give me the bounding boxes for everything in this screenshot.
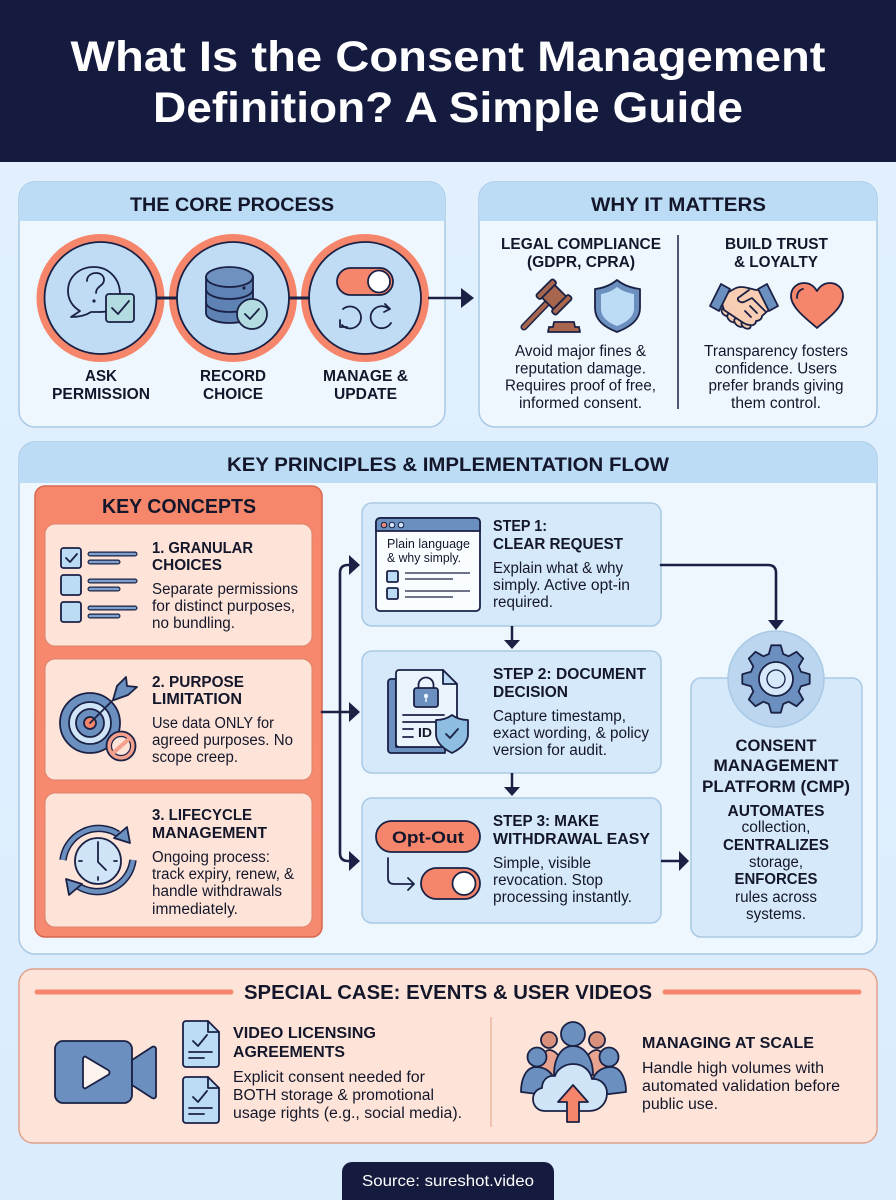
subheading: legal compliance: LEGAL COMPLIANCE — [501, 236, 661, 253]
connector bars between steps — [157, 296, 310, 300]
text: purpose limitation: Use data ONLY for — [152, 715, 274, 732]
text: legal compliance: informed consent. — [519, 395, 642, 412]
arrow: step 3 to platform — [661, 851, 689, 871]
text: step 1: STEP 1: — [493, 518, 547, 535]
text: platform functions — [723, 803, 829, 923]
text: purpose limitation: scope creep. — [152, 749, 238, 766]
icon: video camera — [55, 1041, 156, 1103]
text: step 3: revocation. Stop — [493, 872, 603, 889]
text: platform name — [702, 736, 850, 796]
text: lifecycle management: immediately. — [152, 901, 238, 918]
text: lifecycle management: MANAGEMENT — [152, 825, 267, 842]
label: ask permission: ASK — [85, 368, 117, 385]
label: ask permission: PERMISSION — [52, 386, 150, 403]
heading: key concepts: KEY CONCEPTS — [102, 496, 256, 518]
icon: clock with cycle arrows — [63, 827, 133, 895]
panel: consent management platform — [691, 631, 862, 937]
step: record choice — [173, 238, 293, 403]
text: managing at scale: public use. — [642, 1096, 718, 1113]
heading: the core process: THE CORE PROCESS — [130, 195, 334, 216]
text: granular choices: CHOICES — [152, 557, 222, 574]
text: step 2: exact wording, & policy — [493, 725, 649, 742]
subheading: build trust: & LOYALTY — [734, 254, 818, 271]
icon: document with lock, id and shield: ID — [418, 726, 432, 740]
text: step 1: CLEAR REQUEST — [493, 536, 623, 553]
text: step 2: Capture timestamp, — [493, 708, 626, 725]
text: managing at scale: automated validation before — [642, 1078, 840, 1095]
text: lifecycle management — [152, 807, 295, 918]
text: platform functions: storage, — [749, 854, 803, 871]
text: step 1: required. — [493, 594, 553, 611]
panel: key principles and implementation flow — [19, 442, 877, 954]
text: step 3 — [493, 813, 650, 906]
panel: why it matters — [479, 182, 877, 427]
text: granular choices: Separate permissions — [152, 581, 298, 598]
text: lifecycle management: track expiry, renew, & — [152, 866, 295, 883]
text: build trust: confidence. Users — [715, 360, 837, 378]
label: record choice: CHOICE — [203, 386, 263, 403]
text: lifecycle management: 3. LIFECYCLE — [152, 807, 252, 824]
text: video licensing agreements — [233, 1025, 462, 1122]
text: video licensing agreements: VIDEO LICENSING — [233, 1025, 376, 1042]
icon: toggle and refresh arrows — [337, 268, 393, 328]
step 3: make withdrawal easy — [362, 798, 661, 923]
text: purpose limitation: agreed purposes. No — [152, 732, 293, 749]
text: step 1: Explain what & why — [493, 560, 623, 577]
icon: speech bubble with question and check — [68, 267, 134, 322]
text: purpose limitation: 2. PURPOSE — [152, 674, 244, 691]
text: build trust: them control. — [731, 395, 821, 412]
arrow: step 1 to platform — [661, 565, 784, 630]
text: purpose limitation: LIMITATION — [152, 691, 242, 708]
text: step 2: DECISION — [493, 684, 568, 701]
icon: heart — [791, 283, 843, 328]
panel: the core process — [19, 182, 445, 427]
icon: handshake — [710, 284, 778, 330]
heading: why it matters: WHY IT MATTERS — [591, 195, 766, 216]
icon: opt-out button and toggle: Opt-Out — [392, 828, 464, 847]
text: granular choices: 1. GRANULAR — [152, 540, 253, 557]
icon: gear — [728, 631, 824, 727]
text: platform functions: rules across — [735, 889, 817, 906]
text: managing at scale: MANAGING AT SCALE — [642, 1035, 814, 1052]
icon: opt-out button and toggle — [376, 821, 480, 899]
arrow: step 1 to step 2 — [504, 626, 520, 649]
text: platform functions: CENTRALIZES — [723, 837, 829, 854]
icon: licensing documents — [183, 1021, 219, 1123]
text: video licensing agreements: usage rights (e.g., social media). — [233, 1105, 462, 1122]
step: ask permission — [40, 238, 160, 403]
text: platform name: CONSENT — [736, 736, 817, 755]
text: build trust: prefer brands giving — [708, 378, 844, 394]
icon: browser window with consent form — [376, 518, 480, 611]
text: granular choices: for distinct purposes, — [152, 598, 295, 615]
subheading: build trust: BUILD TRUST — [725, 236, 828, 253]
icon: browser window with consent form: & why simply. — [387, 551, 461, 565]
icon: gavel — [524, 279, 580, 332]
icon: document with lock, id and shield — [388, 670, 468, 753]
label: ask permission — [52, 368, 150, 403]
panel: key concepts — [35, 486, 322, 937]
label: record choice — [200, 368, 266, 403]
text: build trust — [704, 343, 848, 412]
text: platform name: PLATFORM (CMP) — [702, 777, 850, 796]
header banner — [0, 0, 896, 162]
text: managing at scale — [642, 1035, 840, 1113]
text: step 2: STEP 2: DOCUMENT — [493, 666, 646, 683]
icon: browser window with consent form: Plain language — [387, 537, 470, 551]
text: platform functions: AUTOMATES — [728, 803, 825, 820]
text: video licensing agreements: Explicit consent needed for — [233, 1069, 425, 1086]
icon: checklist — [61, 548, 135, 622]
card: lifecycle management — [45, 793, 312, 927]
source pill — [342, 1162, 554, 1200]
arrow: step 2 to step 3 — [504, 773, 520, 796]
text: granular choices — [152, 540, 298, 632]
text: granular choices: no bundling. — [152, 615, 235, 632]
text: purpose limitation — [152, 674, 293, 766]
text: step 2: version for audit. — [493, 742, 607, 759]
text: build trust: Transparency fosters — [704, 343, 848, 360]
title: Definition? A Simple Guide — [153, 84, 743, 132]
label: manage and update — [323, 368, 408, 403]
icon: shield — [595, 280, 640, 332]
text: legal compliance: Requires proof of free, — [505, 378, 656, 394]
title: What Is the Consent Management — [70, 33, 826, 81]
text: video licensing agreements: AGREEMENTS — [233, 1044, 345, 1061]
source pill: Source: sureshot.video — [362, 1173, 534, 1190]
text: video licensing agreements: BOTH storage & promotional — [233, 1087, 434, 1104]
arrows: concepts branching to steps — [322, 555, 360, 871]
text: platform functions: collection, — [742, 819, 810, 836]
text: platform functions: ENFORCES — [734, 871, 818, 888]
heading: key principles: KEY PRINCIPLES & IMPLEMENTATION FLOW — [227, 455, 669, 476]
subheading: legal compliance: (GDPR, CPRA) — [527, 254, 635, 271]
text: lifecycle management: Ongoing process: — [152, 849, 270, 866]
step: manage and update — [305, 238, 425, 403]
arrow: core process to why it matters — [428, 288, 474, 308]
heading: special case: SPECIAL CASE: EVENTS & USER VIDEOS — [244, 982, 652, 1004]
label: manage and update: MANAGE & — [323, 368, 408, 385]
icon: target with arrow and prohibition sign — [60, 677, 137, 760]
text: legal compliance: reputation damage. — [515, 360, 646, 378]
text: step 3: WITHDRAWAL EASY — [493, 831, 650, 848]
text: platform functions: systems. — [746, 906, 806, 923]
panel: special case — [19, 969, 877, 1143]
text: step 3: STEP 3: MAKE — [493, 813, 599, 830]
text: step 2 — [493, 666, 649, 759]
title — [70, 33, 826, 132]
label: record choice: RECORD — [200, 368, 266, 385]
text: step 3: processing instantly. — [493, 889, 632, 906]
subheading: legal compliance — [501, 236, 661, 271]
step 2: document decision — [362, 651, 661, 773]
subheading: build trust — [725, 236, 828, 271]
label: manage and update: UPDATE — [334, 386, 397, 403]
card: purpose limitation — [45, 659, 312, 780]
text: step 1: simply. Active opt-in — [493, 577, 630, 594]
text: step 3: Simple, visible — [493, 855, 591, 872]
card: granular choices — [45, 524, 312, 646]
step 1: clear request — [362, 503, 661, 626]
icon: crowd with upload cloud — [521, 1022, 626, 1122]
text: step 1 — [493, 518, 630, 611]
text: legal compliance: Avoid major fines & — [515, 343, 647, 360]
text: managing at scale: Handle high volumes with — [642, 1060, 824, 1077]
text: lifecycle management: handle withdrawals — [152, 883, 282, 900]
text: platform name: MANAGEMENT — [714, 756, 839, 775]
text: legal compliance — [505, 343, 656, 412]
icon: database with check — [206, 267, 267, 329]
